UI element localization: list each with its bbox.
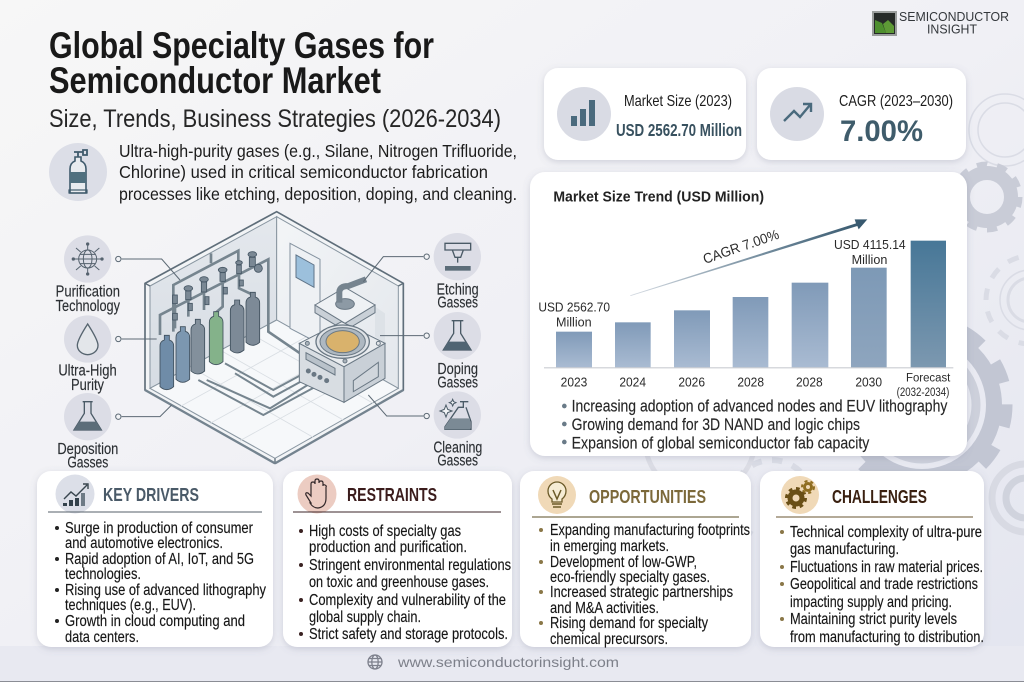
gas cylinders	[160, 292, 260, 390]
panel: CAGR: 7.00%	[840, 115, 923, 148]
panel: opportunities	[520, 471, 751, 648]
key drivers list: Rising use of advanced lithography	[65, 582, 266, 599]
axis labels: 2030	[855, 376, 882, 390]
gas piping manifold	[160, 251, 327, 415]
key drivers list: Rapid adoption of AI, IoT, and 5G	[65, 551, 254, 568]
opportunities list: Increased strategic partnerships	[550, 584, 733, 601]
panel: key drivers: KEY DRIVERS	[103, 485, 199, 505]
icon: doping flask	[434, 312, 481, 359]
door	[290, 243, 320, 344]
opportunities list: Rising demand for specialty	[550, 615, 708, 632]
panel: restraints	[283, 471, 512, 647]
value labels	[538, 237, 906, 330]
CAGR arrow: CAGR 7.00%	[701, 226, 781, 267]
challenges list: impacting supply and pricing.	[790, 594, 952, 611]
key drivers list	[55, 520, 266, 646]
panel: challenges: CHALLENGES	[832, 487, 927, 507]
key drivers list: and automotive electronics.	[65, 535, 223, 552]
callout lines	[116, 254, 429, 419]
room shell	[145, 212, 403, 463]
opportunities list: Development of low-GWP,	[550, 554, 697, 571]
icon labels: Gasses	[437, 295, 478, 312]
subtitle: Size, Trends, Business Strategies (2026-2034)	[49, 105, 501, 133]
icon labels: Purification	[56, 284, 120, 301]
restraints list: production and purification.	[309, 539, 467, 556]
title: Semiconductor Market	[49, 60, 381, 101]
restraints list: on toxic and greenhouse gases.	[309, 574, 489, 591]
bar chart	[544, 241, 953, 368]
chart bullet list: Growing demand for 3D NAND and logic chips	[572, 415, 860, 434]
panel: market size	[544, 68, 746, 160]
axis labels: (2032-2034)	[897, 385, 949, 399]
challenges list: Geopolitical and trade restrictions	[790, 576, 978, 593]
axis labels: 2024	[619, 376, 646, 390]
icon: ultra-high purity drop	[64, 315, 111, 363]
description	[119, 141, 517, 204]
axis labels: Forecast	[906, 371, 951, 385]
icon: bar chart	[557, 87, 611, 141]
icon labels: Technology	[56, 298, 120, 315]
etch chamber	[299, 279, 385, 402]
icon: light bulb	[538, 476, 576, 514]
icon: gears	[781, 476, 819, 514]
website: www.semiconductorinsight.com	[397, 654, 619, 670]
challenges list: gas manufacturing.	[790, 541, 899, 558]
key drivers list: technologies.	[65, 566, 141, 583]
icon labels: Etching	[437, 281, 479, 298]
icon labels: Gasses	[437, 453, 478, 470]
axis labels: 2028	[737, 376, 764, 390]
opportunities list	[539, 522, 750, 648]
opportunities list: and M&A activities.	[550, 600, 659, 617]
opportunities list: eco-friendly specialty gases.	[550, 569, 710, 586]
panel: restraints: RESTRAINTS	[347, 485, 437, 505]
value labels: USD 4115.14	[834, 237, 906, 252]
valves	[173, 252, 262, 320]
chart bullet list	[562, 397, 948, 452]
panel: key drivers	[37, 471, 273, 647]
restraints list	[299, 523, 511, 643]
opportunities list: Expanding manufacturing footprints	[550, 522, 750, 539]
key drivers list: Growth in cloud computing and	[65, 613, 245, 630]
key drivers list: Surge in production of consumer	[65, 520, 254, 537]
opportunities list: chemical precursors.	[550, 631, 668, 648]
icon labels: Gasses	[67, 454, 109, 471]
cleanroom illustration with callouts	[56, 212, 482, 471]
icon labels: Purity	[71, 377, 104, 394]
value labels: USD 2562.70	[538, 300, 610, 315]
icon: cleaning spray	[434, 391, 481, 439]
key drivers list: data centers.	[65, 629, 139, 646]
icon: gas cylinder	[49, 143, 107, 201]
icon: rising bars	[56, 474, 94, 514]
icon: hand	[298, 474, 336, 514]
axis labels: 2028	[796, 376, 823, 390]
panel: market size: USD 2562.70 Million	[616, 120, 742, 140]
panel: market size: Market Size (2023)	[624, 93, 732, 110]
icon labels: Ultra-High	[58, 363, 117, 380]
chart bullet list: Expansion of global semiconductor fab capacity	[572, 433, 870, 452]
description: Ultra-high-purity gases (e.g., Silane, Nitrogen Trifluoride,	[119, 141, 517, 161]
axis labels: 2023	[561, 376, 587, 390]
chart title: Market Size Trend (USD Million)	[553, 190, 764, 206]
icon: globe	[368, 655, 382, 669]
challenges list: Technical complexity of ultra-pure	[790, 524, 982, 541]
panel: CAGR: CAGR (2023–2030)	[839, 93, 953, 110]
panel: opportunities: OPPORTUNITIES	[589, 487, 706, 507]
restraints list: global supply chain.	[309, 609, 421, 626]
icon labels	[56, 281, 482, 471]
challenges list: Maintaining strict purity levels	[790, 611, 957, 628]
icon: trend arrow	[770, 87, 824, 141]
CAGR arrow	[630, 219, 867, 296]
value labels: Million	[556, 315, 592, 330]
restraints list: Stringent environmental regulations	[309, 557, 511, 574]
logo: INSIGHT	[927, 22, 977, 36]
background gears	[645, 94, 1024, 540]
restraints list: Complexity and vulnerability of the	[309, 592, 506, 609]
value labels: Million	[852, 252, 887, 267]
icon: purification technology	[64, 235, 111, 283]
logo	[872, 9, 1009, 36]
axis labels	[561, 371, 951, 399]
icon labels: Gasses	[437, 374, 478, 391]
chart bullet list: Increasing adoption of advanced nodes and EUV lithography	[572, 397, 948, 416]
opportunities list: in emerging markets.	[550, 538, 669, 555]
icon labels: Doping	[437, 361, 478, 378]
key drivers list: techniques (e.g., EUV).	[65, 597, 196, 614]
footer band	[0, 646, 1024, 682]
icon labels: Deposition	[57, 441, 118, 458]
challenges list	[780, 524, 984, 646]
logo: SEMICONDUCTOR	[899, 9, 1009, 24]
panel: CAGR	[757, 68, 966, 160]
axis labels: 2026	[678, 376, 705, 390]
description: Chlorine) used in critical semiconductor fabrication	[119, 162, 488, 182]
title	[49, 25, 434, 101]
panel: market size trend chart	[530, 172, 967, 456]
restraints list: Strict safety and storage protocols.	[309, 626, 508, 643]
floor pipes	[225, 363, 308, 390]
icon labels: Cleaning	[433, 439, 482, 456]
icon: etching	[434, 233, 481, 280]
description: processes like etching, deposition, doping, and cleaning.	[119, 184, 517, 204]
panel: challenges	[760, 471, 984, 647]
title: Global Specialty Gases for	[49, 25, 434, 66]
restraints list: High costs of specialty gas	[309, 523, 461, 540]
icon: deposition flask	[64, 393, 111, 440]
